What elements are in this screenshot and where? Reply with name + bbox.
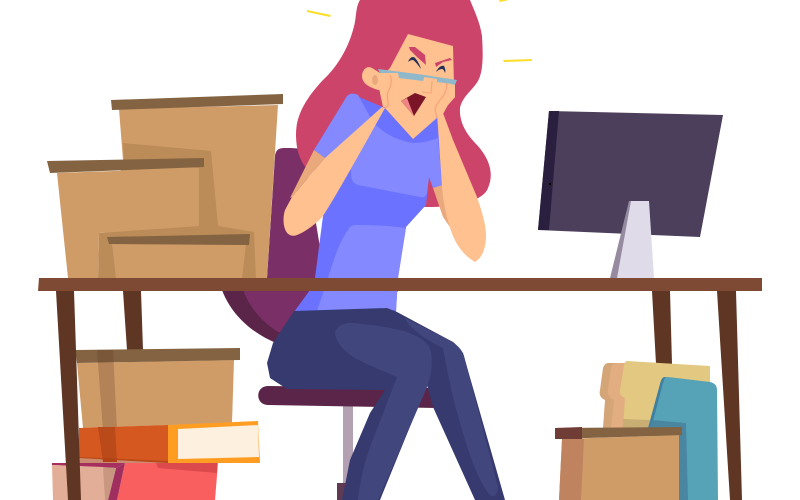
- trousers base: [267, 308, 505, 500]
- small box body: [112, 244, 246, 278]
- chair seat: [258, 386, 440, 408]
- tongue: [401, 98, 414, 116]
- forearm: [284, 107, 385, 236]
- bright edge: [168, 421, 260, 463]
- tan folder: [600, 363, 625, 428]
- office chair: [222, 148, 440, 500]
- pages: [178, 425, 259, 459]
- pink book cover: [117, 463, 218, 500]
- monitor side edge: [538, 111, 559, 230]
- desk front leg right: [717, 291, 742, 500]
- desk legs, rear: [123, 291, 672, 364]
- middle box lid: [47, 158, 204, 173]
- book top edge: [52, 463, 125, 468]
- desk top: [38, 278, 762, 291]
- peach folder: [608, 363, 635, 428]
- left lens: [378, 69, 425, 81]
- large box body: [98, 105, 278, 278]
- large box lid: [111, 94, 283, 110]
- chair back: [243, 148, 325, 340]
- book pages: [52, 465, 105, 500]
- page shadow: [103, 467, 116, 500]
- upper arm shadow: [433, 185, 454, 233]
- hand: [380, 73, 392, 108]
- desk front leg left: [56, 291, 81, 500]
- back leg highlight: [405, 318, 498, 496]
- floor box body: [559, 435, 679, 500]
- glasses: [378, 69, 457, 87]
- hand: [437, 83, 455, 116]
- monitor button: [549, 183, 551, 185]
- stress sparks: [307, 0, 532, 62]
- yellow folder shadow: [623, 419, 650, 428]
- chest highlight: [351, 122, 442, 197]
- right lens: [437, 77, 457, 87]
- stack of cardboard boxes on desk: [47, 94, 283, 278]
- finger outline: [435, 83, 447, 118]
- floor box lid side: [555, 427, 582, 439]
- box lid: [75, 348, 240, 363]
- ear: [362, 67, 386, 91]
- folders and box on floor: [555, 361, 718, 500]
- eyes squeezed shut: [408, 57, 445, 73]
- hair: [296, 0, 491, 207]
- shirt base: [294, 94, 450, 312]
- teal folder shadow: [650, 420, 688, 500]
- chair pole: [343, 405, 353, 485]
- large box shadow: [98, 143, 256, 278]
- small box lid: [107, 234, 250, 245]
- book shadow: [156, 463, 217, 473]
- front leg highlight: [335, 323, 432, 500]
- teal folder: [650, 377, 718, 500]
- floor box lid: [555, 427, 682, 439]
- lower shirt highlight: [317, 225, 406, 311]
- trousers: [267, 308, 505, 500]
- bridge: [424, 75, 437, 79]
- middle box body: [57, 168, 199, 278]
- chair shell: [222, 290, 400, 350]
- right arm with hand on cheek: [433, 83, 486, 262]
- leg shadow on box: [97, 350, 117, 430]
- nose: [422, 81, 432, 93]
- chair base: [337, 483, 349, 500]
- pink book: [52, 463, 218, 500]
- cover shadow: [98, 427, 117, 462]
- mouth: [401, 93, 426, 116]
- orange book: [79, 421, 260, 463]
- floor box side: [559, 439, 584, 500]
- screen back: [538, 111, 723, 237]
- forearm: [437, 113, 486, 262]
- stand: [617, 201, 654, 278]
- eyebrows: [409, 47, 452, 67]
- finger outline: [385, 75, 391, 108]
- woman's torso: shirt: [294, 94, 450, 312]
- face: [378, 34, 455, 139]
- box body: [77, 360, 234, 428]
- orange cover: [79, 425, 168, 463]
- ear shadow: [372, 75, 378, 85]
- stand shadow: [610, 201, 633, 278]
- teal folder edge: [648, 377, 672, 430]
- sleeve highlight: [314, 94, 373, 158]
- computer monitor: [538, 111, 723, 278]
- box under desk: [75, 348, 240, 430]
- yellow folder: [620, 361, 710, 428]
- cover bottom edge: [79, 457, 168, 463]
- upper arm shadow: [290, 150, 325, 198]
- mouth interior: [401, 93, 426, 116]
- left arm with hand on cheek: [284, 73, 392, 236]
- book spine: [108, 463, 125, 500]
